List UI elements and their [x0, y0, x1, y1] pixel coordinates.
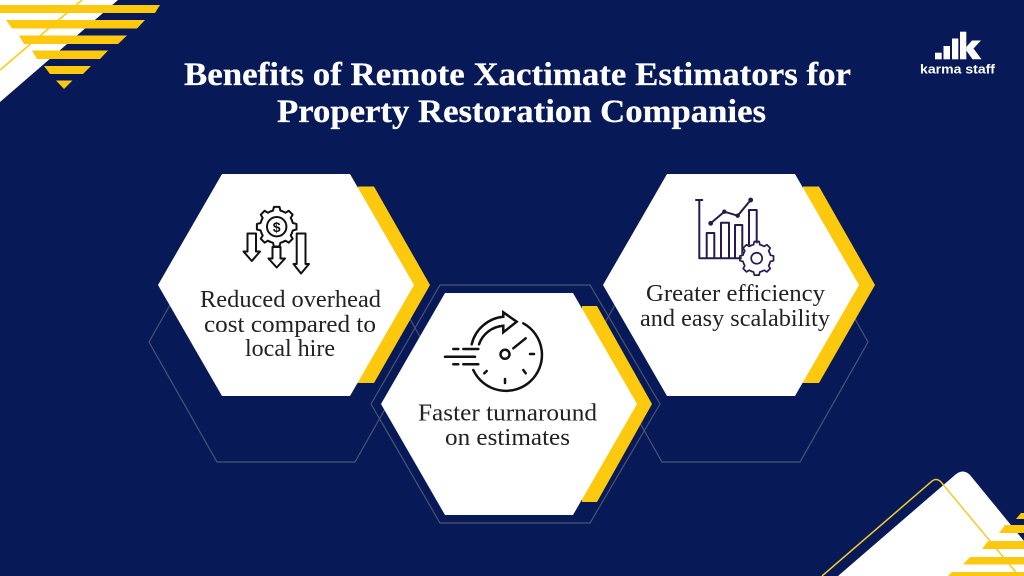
text: reduced overhead cost: cost compared to — [204, 312, 376, 338]
bottom-right corner decoration — [822, 472, 1024, 576]
icon: gear with dollar and down arrows — [244, 207, 309, 274]
title: Property Restoration Companies — [277, 94, 766, 130]
logo: karma staff — [920, 32, 996, 76]
logo: karma staff: karma staff — [920, 62, 996, 76]
title: Benefits of Remote Xactimate Estimators for — [184, 57, 851, 93]
text: greater efficiency — [640, 281, 830, 332]
top-left corner decoration — [0, 0, 160, 102]
panel: greater efficiency — [603, 174, 875, 396]
icon: gear with dollar and down arrows: $ — [273, 219, 281, 235]
background hexagon outlines — [149, 222, 868, 523]
text: faster turnaround: on estimates — [445, 425, 570, 451]
text: faster turnaround — [418, 400, 597, 451]
icon: stopwatch with curved arrow — [445, 312, 542, 391]
text: greater efficiency: Greater efficiency — [646, 281, 825, 307]
title — [184, 57, 851, 130]
text: greater efficiency: and easy scalability — [640, 306, 830, 332]
icon: bar chart with gear — [696, 198, 774, 275]
panel: reduced overhead cost — [158, 174, 430, 396]
text: faster turnaround: Faster turnaround — [418, 400, 597, 426]
text: reduced overhead cost: local hire — [245, 336, 335, 362]
text: reduced overhead cost — [200, 287, 381, 362]
panel: faster turnaround — [381, 293, 652, 515]
text: reduced overhead cost: Reduced overhead — [200, 287, 381, 313]
